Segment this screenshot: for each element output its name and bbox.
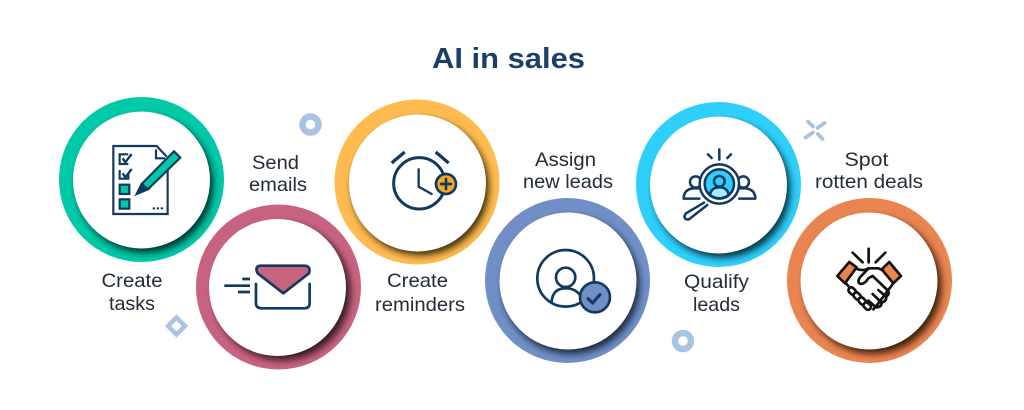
label: spot rotten deals: rotten deals [815,171,923,193]
icon: alarm clock [392,152,456,209]
label: send emails: Send [252,152,299,174]
label: create reminders: Create [387,270,448,292]
panel: create reminders [334,100,500,264]
label: create tasks [102,270,162,315]
panel: create tasks [59,97,224,262]
decoration: cross [806,122,824,139]
label: assign new leads [523,149,613,193]
label: send emails: emails [249,174,307,196]
label: assign new leads: Assign [535,149,596,171]
panel: assign new leads [485,198,650,363]
icon: handshake [837,249,901,311]
title: AI in sales [432,43,585,75]
decoration: ring bottom [675,333,691,349]
label: spot rotten deals [815,149,923,193]
icon: envelope [224,266,310,308]
label: spot rotten deals: Spot [844,149,889,171]
icon: checklist and pencil [113,146,180,214]
panel: send emails [196,204,361,370]
icon: user with check [537,250,610,312]
panel: spot rotten deals [787,198,952,363]
label: qualify leads: Qualify [684,271,749,293]
label: create reminders: reminders [375,294,465,316]
label: create reminders [375,270,465,316]
label: send emails [249,152,307,196]
decoration: diamond [168,318,185,334]
label: create tasks: Create [102,270,162,292]
panel: qualify leads [636,102,801,267]
label: qualify leads [684,271,749,316]
label: qualify leads: leads [693,294,740,316]
label: create tasks: tasks [109,293,155,315]
decoration: ring top [302,116,318,132]
icon: magnifier over people [684,149,755,220]
label: assign new leads: new leads [523,171,613,193]
